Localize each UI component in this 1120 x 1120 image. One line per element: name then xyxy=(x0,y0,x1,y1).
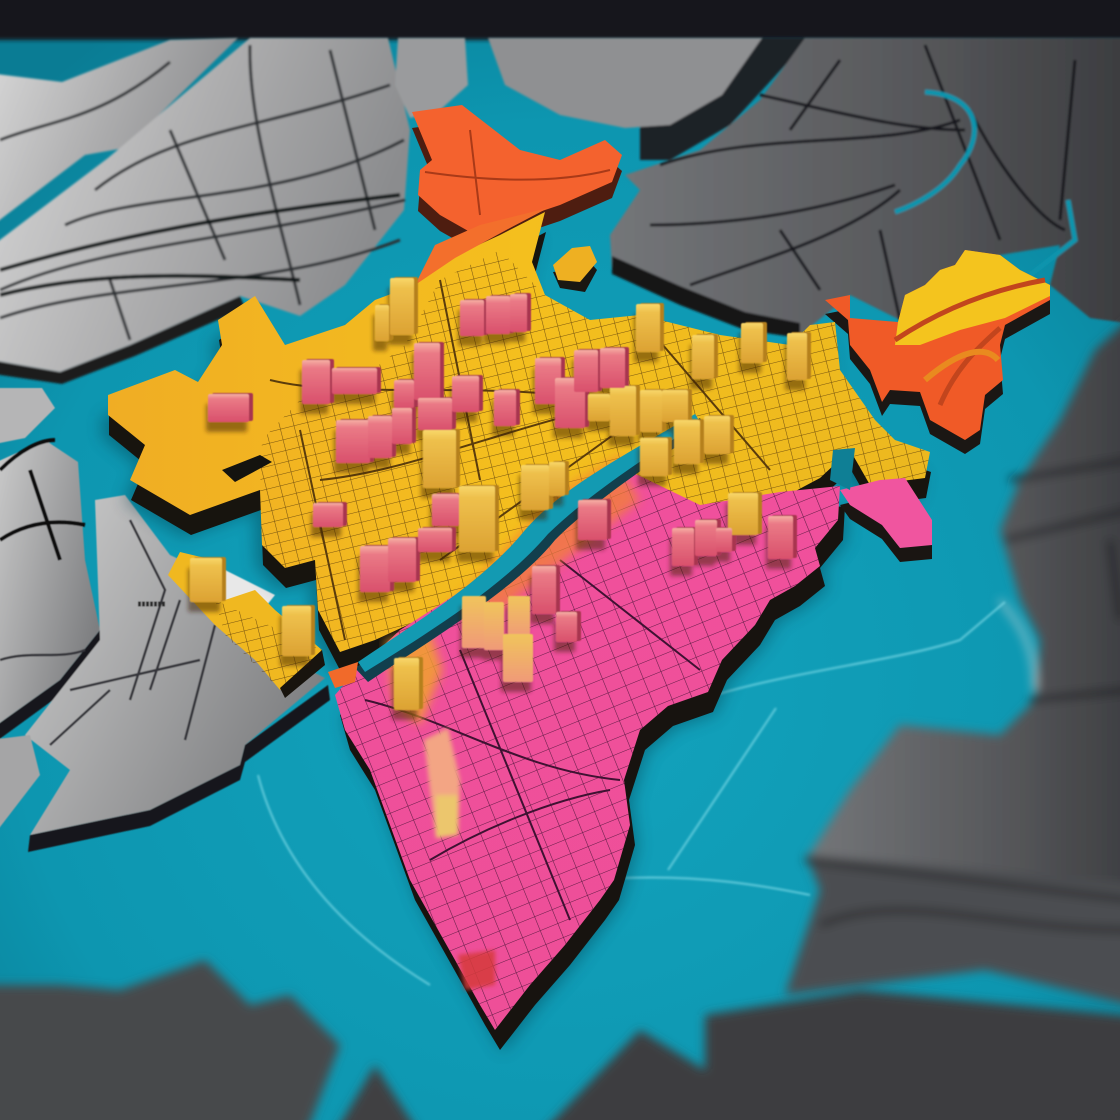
river xyxy=(355,414,855,682)
land: east dark districts xyxy=(785,300,1120,1010)
land: west grey districts xyxy=(0,388,330,852)
top dark edge xyxy=(0,0,1120,40)
building shadows xyxy=(188,288,805,720)
pink tower sides xyxy=(212,293,797,641)
district shadow on water xyxy=(102,234,924,1052)
district: small yellow island xyxy=(553,246,597,292)
buildings xyxy=(188,277,811,720)
district: orange north xyxy=(412,105,622,248)
land: top-left grey districts xyxy=(0,38,468,384)
yellow towers xyxy=(190,278,807,710)
district: west yellow strip xyxy=(168,552,358,698)
district: orange east xyxy=(825,250,1050,454)
blurred foreground tower xyxy=(424,728,460,838)
water channels xyxy=(258,602,1005,985)
pink towers xyxy=(208,294,793,642)
district: pink south xyxy=(335,468,932,1050)
peach towers xyxy=(462,596,533,682)
district: yellow main xyxy=(108,208,931,672)
land: bottom dark districts xyxy=(0,960,1120,1120)
land: top-centre and top-right grey districts xyxy=(488,38,1120,338)
yellow tower sides xyxy=(194,277,811,709)
